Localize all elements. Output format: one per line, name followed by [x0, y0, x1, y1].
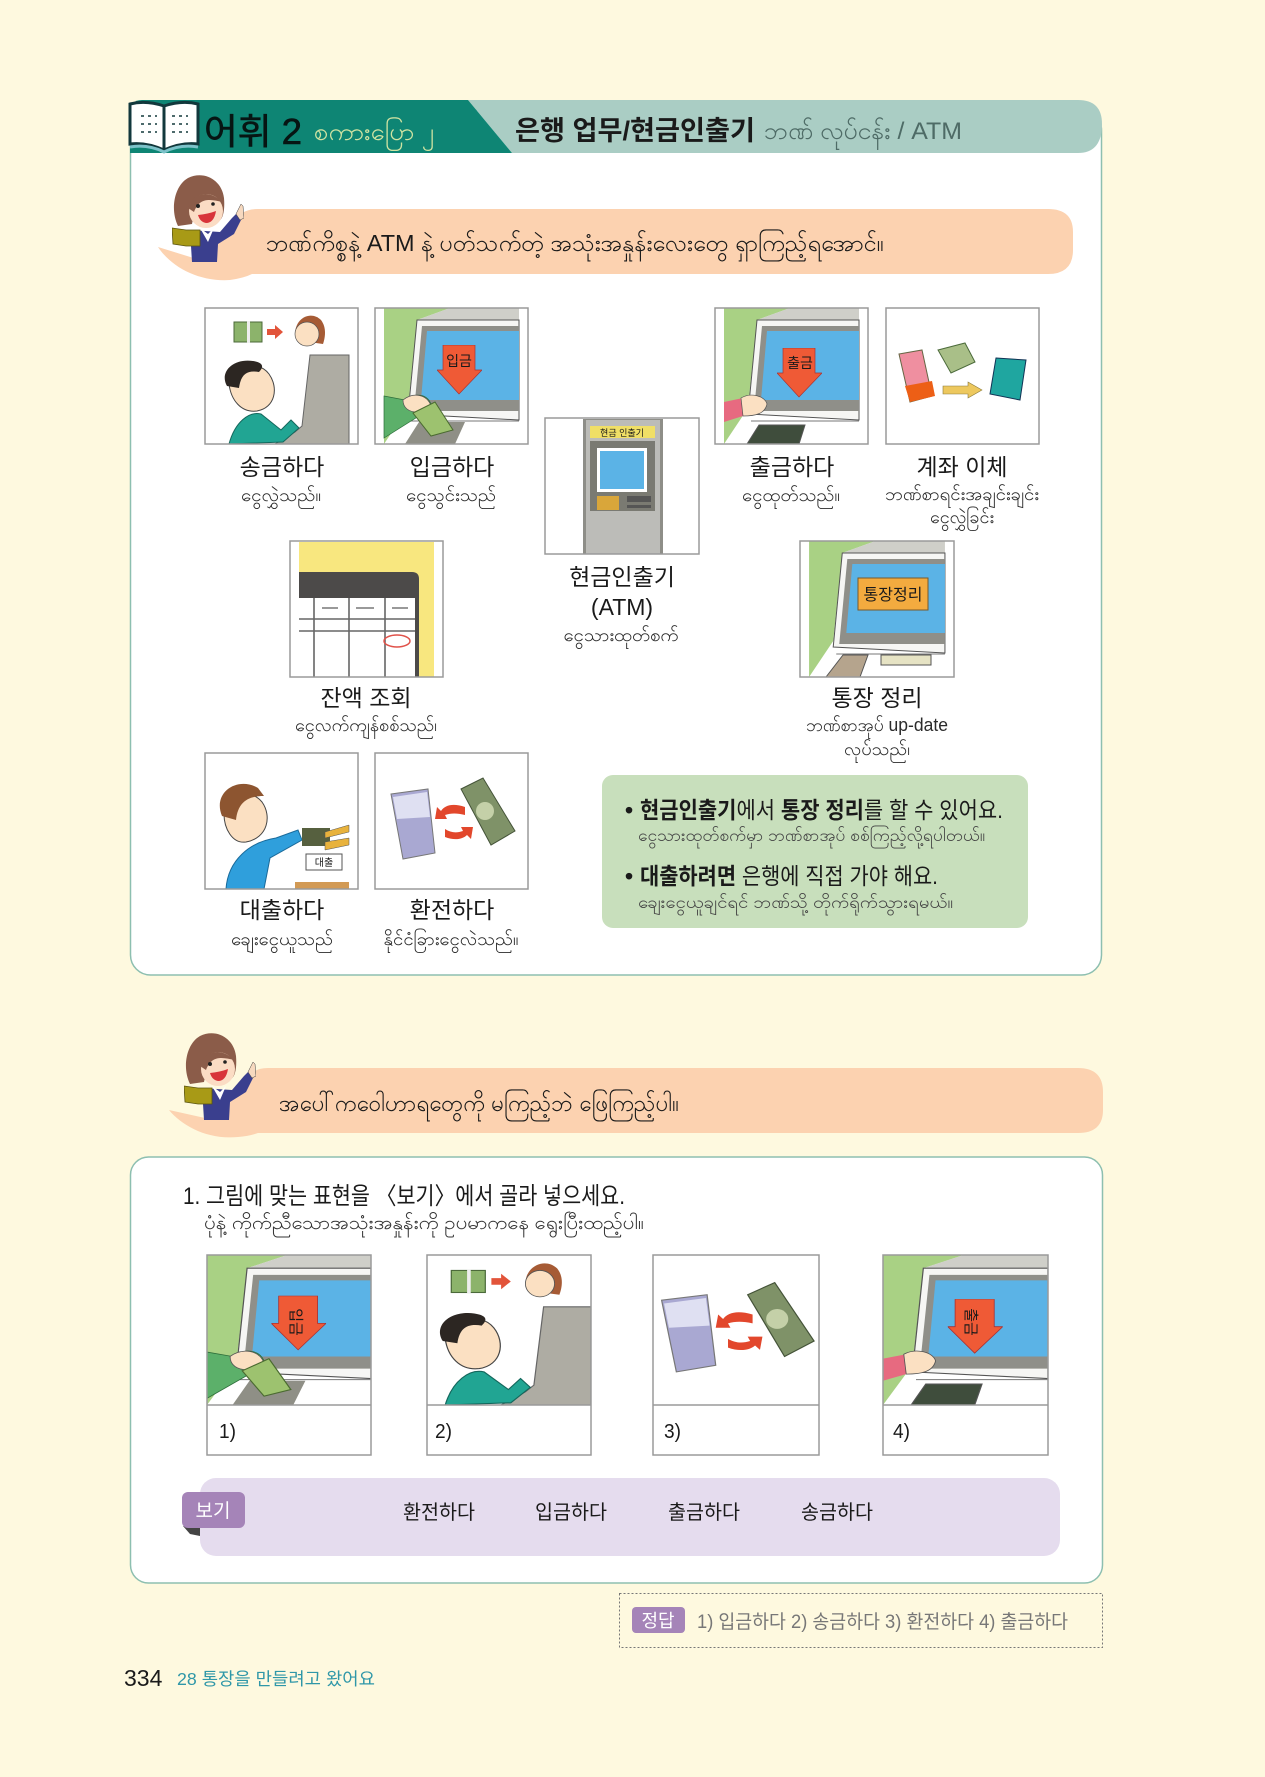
item: passbook update: လုပ်သည်၊	[844, 739, 910, 763]
icon: teacher	[172, 175, 244, 262]
answer box: 1) 입금하다 2) 송금하다 3) 환전하다 4) 출금하다	[697, 1611, 1068, 1633]
tag: example: 보기	[196, 1500, 230, 1522]
heading: Burmese bank tasks and ATM: ဘဏ် လုပ်ငန်း / ATM	[764, 116, 962, 150]
word bank: 송금하다	[801, 1501, 873, 1524]
callout: green tip box	[602, 775, 1028, 928]
callout: green tip box: 대출하려면 은행에 직접 가야 해요.	[640, 863, 938, 889]
question 1: 1. 그림에 맞는 표현을 〈보기〉에서 골라 넣으세요.	[183, 1183, 625, 1210]
item: balance inquiry	[290, 541, 443, 739]
item: deposit money	[375, 308, 528, 509]
question 1: ပုံနဲ့ ကိုက်ညီသောအသုံးအနှုန်းကို ဥပမာကနေ ရွေးပြီးထည့်ပါ။	[204, 1211, 644, 1238]
item: ATM	[545, 418, 699, 649]
heading: Burmese vocabulary 2: စကားပြော ၂	[314, 116, 434, 151]
exercise image 2	[416, 1255, 602, 1455]
exercise image 1	[196, 1255, 382, 1455]
callout: green tip box: 현금인출기에서 통장 정리를 할 수 있어요.	[640, 797, 1003, 823]
item: deposit money: 입금하다	[410, 454, 494, 480]
callout: green tip box: ငွေသားထုတ်စက်မှာ ဘဏ်စာအုပ် စစ်ကြည့်လို့ရပါတယ်။	[638, 824, 985, 849]
item: account transfer: ငွေလွှဲခြင်း	[930, 506, 994, 531]
callout: green tip box: •	[625, 797, 633, 823]
item: ATM: 현금 인출기	[600, 428, 644, 438]
word bank: 입금하다	[535, 1501, 607, 1524]
item: passbook update	[800, 541, 954, 763]
item: balance inquiry: 잔액 조회	[320, 685, 412, 711]
icon: teacher	[184, 1033, 256, 1120]
item: withdraw money: 출금	[787, 355, 813, 371]
exercise image 1: 1)	[219, 1421, 236, 1443]
exercise image 1: 입금	[287, 1308, 304, 1336]
item: take out a loan: 대출	[315, 857, 333, 869]
icon: open book	[130, 102, 198, 152]
item: ATM: ငွေသားထုတ်စက်	[564, 625, 678, 649]
exercise image 3	[642, 1255, 830, 1455]
header bar	[130, 100, 1102, 153]
panel: exercise	[130, 1157, 1102, 1583]
panel: vocabulary 2	[130, 100, 1102, 975]
item: withdraw money: ငွေထုတ်သည်။	[742, 485, 840, 509]
item: passbook update: 통장 정리	[831, 685, 923, 711]
callout: green tip box: •	[625, 863, 633, 889]
heading: bank tasks and ATM: 은행 업무/현금인출기	[515, 116, 755, 146]
item: take out a loan: ချေးငွေယူသည်	[231, 929, 333, 953]
item: ATM: 현금인출기	[569, 564, 675, 590]
item: exchange money: နိုင်ငံခြားငွေလဲသည်။	[384, 928, 518, 953]
chapter title: 28 통장을 만들려고 왔어요	[177, 1669, 375, 1689]
answer box	[620, 1594, 1102, 1648]
exercise image 4	[872, 1255, 1059, 1455]
item: withdraw money: 출금하다	[750, 454, 834, 480]
item: remit money: 송금하다	[240, 454, 324, 480]
heading: vocabulary 2: 어휘 2	[204, 111, 302, 152]
text: exercise instruction: အပေါ်ကဝေါဟာရတွေကို မကြည့်ဘဲ ဖြေကြည့်ပါ။	[279, 1090, 679, 1122]
callout: green tip box: ချေးငွေယူချင်ရင် ဘဏ်သို့ တိုက်ရိုက်သွားရမယ်။	[638, 893, 953, 916]
exercise image 3: 3)	[664, 1421, 681, 1443]
word bank	[182, 1478, 1060, 1556]
exercise image 2: 2)	[435, 1421, 452, 1443]
item: account transfer: 계좌 이체	[916, 454, 1008, 480]
item: account transfer	[885, 308, 1039, 531]
item: deposit money: 입금	[446, 353, 472, 369]
item: remit money	[205, 308, 358, 509]
item: balance inquiry: ငွေလက်ကျန်စစ်သည်၊	[295, 715, 437, 739]
answer box: 정답	[641, 1611, 675, 1631]
item: exchange money	[375, 753, 528, 953]
item: account transfer: ဘဏ်စာရင်းအချင်းချင်း	[885, 484, 1039, 508]
callout: exercise speech banner	[169, 1033, 1103, 1137]
item: deposit money: ငွေသွင်းသည်	[406, 485, 496, 509]
tag: example	[182, 1492, 245, 1528]
item: take out a loan: 대출하다	[240, 897, 324, 923]
item: passbook update: ဘဏ်စာအုပ် up-date	[806, 715, 948, 739]
callout: intro speech banner	[158, 175, 1073, 280]
word bank: 출금하다	[668, 1501, 740, 1524]
question 1	[183, 1183, 644, 1238]
item: exchange money: 환전하다	[410, 897, 494, 923]
exercise image 4: 4)	[893, 1421, 910, 1443]
exercise image 4: 출금	[962, 1308, 979, 1336]
item: ATM: (ATM)	[591, 594, 653, 620]
page number: 334	[124, 1665, 163, 1691]
item: withdraw money	[715, 308, 868, 509]
text: intro instruction: ဘဏ်ကိစ္စနဲ့ ATM နဲ့ ပတ်သက်တဲ့ အသုံးအနှုန်းလေးတွေ ရှာကြည့်ရအောင်။	[266, 230, 884, 262]
word bank: 환전하다	[403, 1501, 475, 1524]
item: passbook update: 통장정리	[864, 586, 922, 604]
item: take out a loan	[205, 753, 358, 953]
item: remit money: ငွေလွှဲသည်။	[241, 485, 321, 509]
